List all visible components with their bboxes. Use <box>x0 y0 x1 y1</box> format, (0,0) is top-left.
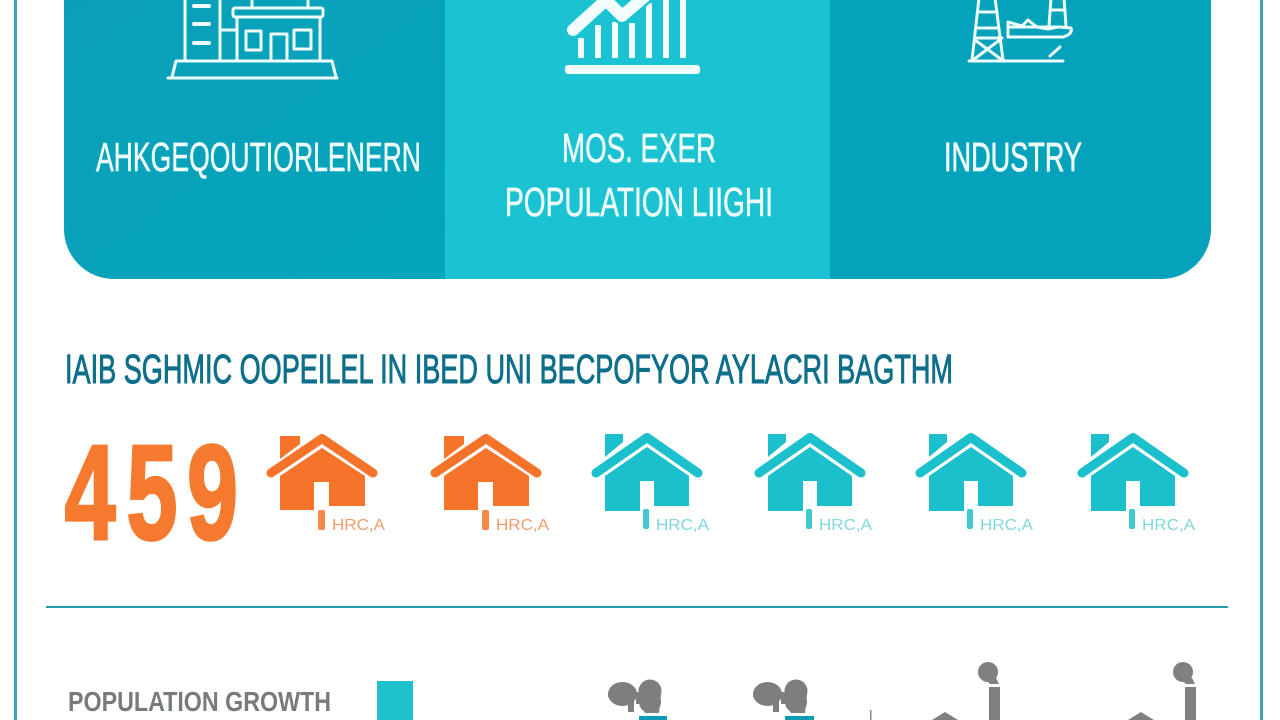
icon: factory 2 <box>1128 662 1196 720</box>
panel: centre category <box>445 0 830 279</box>
icon: teal house 1 <box>596 434 709 534</box>
panel: top categories <box>64 0 1211 279</box>
label: left category: AHKGEQOUTIORLENERN <box>96 134 421 180</box>
icon: teal house 3: HRC,A <box>980 517 1033 534</box>
icon: teal house 2 <box>759 434 872 534</box>
icon: teal house 3 <box>920 434 1033 534</box>
icon: orange house 2 <box>435 436 549 534</box>
icon: factory 1 <box>932 662 1000 720</box>
icon: rising bar chart <box>565 0 700 74</box>
icon: orange house 1 <box>271 436 385 534</box>
icon: orange house 1: HRC,A <box>332 517 385 534</box>
icon: smoke stack 2 <box>753 680 814 720</box>
label: right category: INDUSTRY <box>944 134 1082 180</box>
icon: smoke stack 1 <box>608 680 667 720</box>
label: population growth: POPULATION GROWTH <box>68 686 331 717</box>
icon: teal house 4: HRC,A <box>1142 517 1195 534</box>
panel: left category <box>64 0 445 279</box>
big number: 459 <box>65 419 238 568</box>
icon: teal house 4 <box>1082 434 1195 534</box>
panel: right category <box>830 0 1211 279</box>
label: centre category line two: POPULATION LIIGHI <box>505 179 773 225</box>
icon: oil rig <box>969 0 1071 61</box>
icon: buildings <box>168 0 337 78</box>
label: centre category line one: MOS. EXER <box>562 125 716 171</box>
icon: teal house 2: HRC,A <box>819 517 872 534</box>
bar: population growth <box>377 681 413 720</box>
icon: teal house 1: HRC,A <box>656 517 709 534</box>
icon: orange house 2: HRC,A <box>496 517 549 534</box>
